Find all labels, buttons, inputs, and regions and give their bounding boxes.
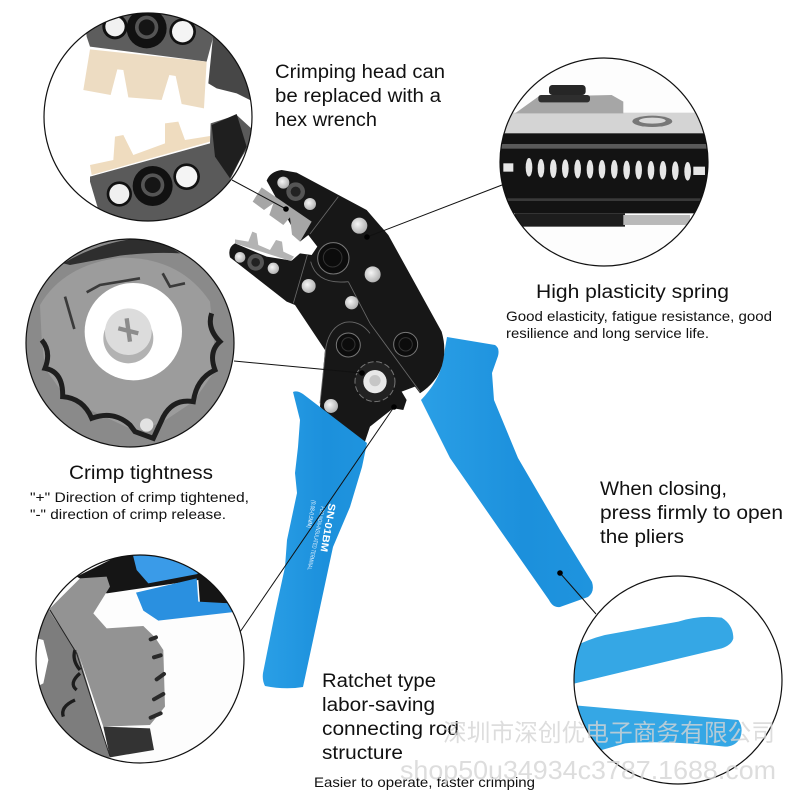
pliers tool <box>229 170 593 688</box>
text: high plasticity spring: High plasticity spring <box>536 282 729 303</box>
lower edge <box>515 213 625 227</box>
handle text <box>305 500 337 571</box>
jaw arm <box>208 36 250 100</box>
ratchet base <box>103 727 154 757</box>
ratchet wheel <box>355 362 395 402</box>
upper brass die <box>83 49 207 108</box>
text: crimping head: hex wrench <box>275 110 377 131</box>
text: high plasticity spring <box>506 282 772 341</box>
rivets <box>235 177 381 413</box>
circle: handle ends close-up <box>568 576 782 784</box>
text: ratchet structure: Ratchet type <box>322 671 436 692</box>
text: crimping head: Crimping head can <box>275 62 445 83</box>
blue upper piece <box>133 556 198 584</box>
leader line: handle <box>557 570 596 614</box>
washer <box>85 283 182 380</box>
right blue handle <box>421 337 593 607</box>
text: ratchet structure: structure <box>322 743 403 764</box>
ratchet plate <box>48 577 165 727</box>
top rivet assembly <box>515 95 623 113</box>
leader line: ratchet <box>240 404 397 632</box>
white notch <box>36 638 48 685</box>
text: high plasticity spring: Good elasticity, fatigue resistance, good <box>506 308 772 324</box>
watermark <box>400 720 776 785</box>
left blue handle <box>263 391 367 688</box>
text: high plasticity spring: resilience and long service life. <box>506 325 709 341</box>
text: ratchet structure: labor-saving <box>322 695 435 716</box>
leader line: spring <box>364 185 502 240</box>
lower brass die <box>90 122 210 175</box>
circle: ratchet teeth close-up <box>30 550 250 770</box>
lower jaw plate <box>90 115 257 227</box>
text: crimp tightness: "-" direction of crimp release. <box>30 506 226 522</box>
hex bolts <box>247 182 305 271</box>
upper jaw plate <box>86 14 213 62</box>
spring coils <box>503 158 705 181</box>
light plate <box>504 112 704 134</box>
text: crimp tightness <box>30 463 249 522</box>
seams <box>293 197 420 403</box>
text: when closing <box>600 479 783 548</box>
circle: spring close-up <box>495 50 715 270</box>
watermark: shop50u34934c3787.1688.com <box>400 755 776 785</box>
handle text: FOR NON-INSULATED TERMINAL <box>305 506 325 571</box>
blue lower piece <box>136 578 234 621</box>
scalloped edge <box>42 313 220 438</box>
watermark: 深圳市深创优电子商务有限公司 <box>443 720 775 747</box>
text: ratchet structure <box>314 671 535 790</box>
phillips screw <box>103 328 154 364</box>
text: crimp tightness: "+" Direction of crimp tightened, <box>30 489 249 505</box>
text: crimping head: be replaced with a <box>275 86 441 107</box>
screws <box>102 8 200 207</box>
text: crimping head <box>275 62 445 131</box>
teeth shadows <box>151 637 164 718</box>
body plate <box>229 170 444 447</box>
black housing <box>495 133 715 213</box>
wheel teeth <box>63 650 80 717</box>
handle text: (0.08-0.5MM) <box>305 500 316 528</box>
top dark band <box>63 238 180 265</box>
text: when closing: the pliers <box>600 527 684 548</box>
marks <box>65 273 185 329</box>
black background top <box>77 556 228 604</box>
leader line: crimping head <box>232 180 289 212</box>
handle text: SN-01BM <box>318 502 337 553</box>
wheel face <box>40 258 217 432</box>
leader line: crimp tightness <box>234 361 365 376</box>
pivot pins <box>318 243 418 357</box>
text: crimp tightness: Crimp tightness <box>69 463 213 484</box>
upper handle end <box>568 617 733 685</box>
dark lower arm <box>212 114 247 178</box>
text: when closing: When closing, <box>600 479 727 500</box>
small wheel area <box>38 610 110 758</box>
text: ratchet structure: connecting rod <box>322 719 459 740</box>
circle: ratchet wheel close-up <box>20 235 240 455</box>
black steel body <box>229 170 444 447</box>
lower die <box>235 232 294 261</box>
upper die <box>253 187 312 242</box>
text: ratchet structure: Easier to operate, faster crimping <box>314 774 535 790</box>
lower handle end <box>572 705 742 750</box>
circle: crimping head close-up <box>44 8 257 227</box>
nub <box>140 418 153 432</box>
text: when closing: press firmly to open <box>600 503 783 524</box>
